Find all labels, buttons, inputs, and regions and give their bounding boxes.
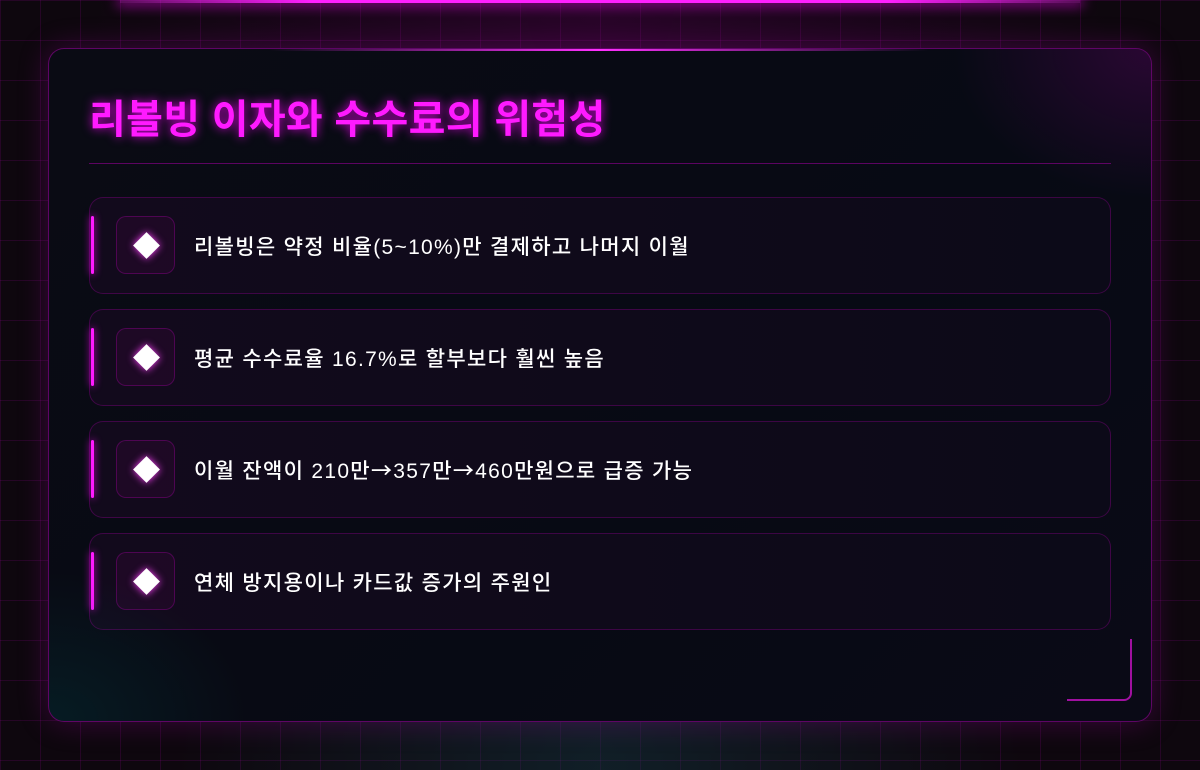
title: 리볼빙 이자와 수수료의 위험성 [89,98,606,142]
item 1 [89,197,1111,294]
text 2: 평균 수수료율 16.7%로 할부보다 훨씬 높음 [194,348,605,371]
icon: diamond [116,216,175,274]
text 4: 연체 방지용이나 카드값 증가의 주원인 [194,572,552,595]
item 4 [89,533,1111,630]
icon: diamond [116,440,175,498]
text 3: 이월 잔액이 210만→357만→460만원으로 급증 가능 [194,455,693,485]
icon: diamond [116,328,175,386]
item 2 [89,309,1111,406]
text 1: 리볼빙은 약정 비율(5~10%)만 결제하고 나머지 이월 [194,236,690,259]
item 3 [89,421,1111,518]
icon: diamond [116,552,175,610]
